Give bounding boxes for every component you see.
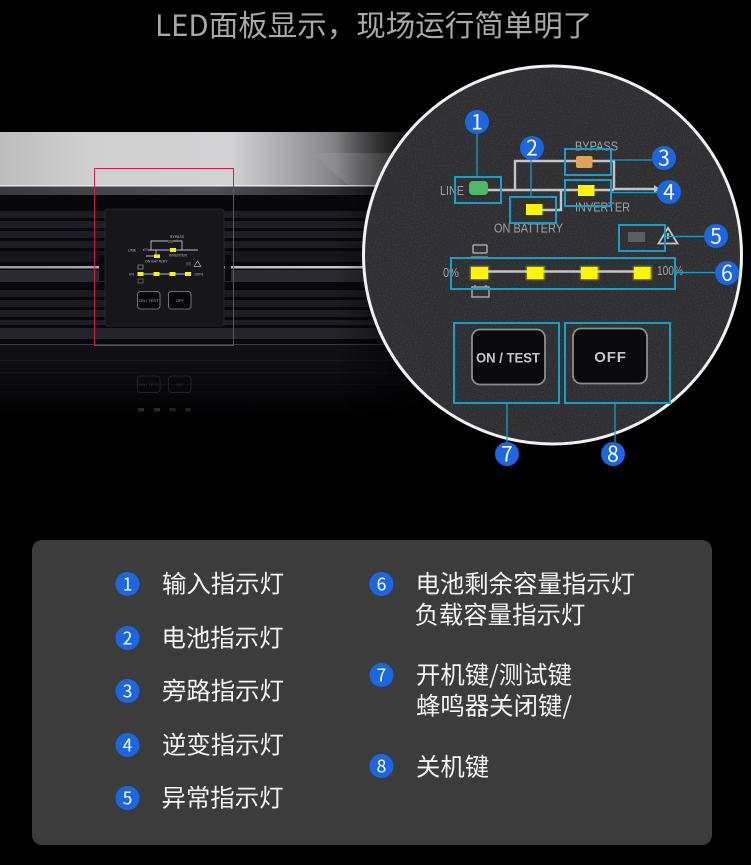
indicator labels: INVERTER	[575, 200, 630, 214]
callout 4: inverter indicator	[565, 176, 681, 206]
legend item 5: 5	[123, 785, 132, 810]
title: LED面板显示，现场运行简单明了	[155, 3, 592, 45]
legend item 3: 3	[123, 678, 132, 703]
OFF button	[573, 328, 647, 384]
legend item 6: 6	[377, 571, 386, 596]
callout 6: capacity indicators	[451, 258, 739, 289]
callout 5: fault indicator	[619, 220, 728, 251]
legend item 6: 负载容量指示灯	[414, 596, 585, 632]
callout 3: bypass indicator: 3	[658, 142, 670, 172]
callout 1: line indicator: 1	[471, 106, 483, 136]
callout 8: off key	[565, 323, 670, 468]
LED: inverter	[578, 185, 594, 196]
OFF button: OFF	[594, 349, 627, 366]
LED: on battery	[526, 204, 542, 215]
indicator labels: 0%	[443, 266, 459, 280]
icon: computer load	[471, 245, 488, 257]
legend item 2: 2	[123, 625, 132, 650]
output arrow	[654, 185, 660, 193]
small control panel on the UPS	[99, 209, 231, 326]
product photo: UPS front	[0, 132, 420, 420]
callout 7: on/test key	[454, 323, 559, 468]
ON/TEST button	[472, 330, 545, 384]
indicator labels: 100%	[657, 264, 683, 278]
callout 8: off key: 8	[607, 438, 619, 468]
LED: bypass (orange)	[576, 156, 592, 168]
legend item 5: 异常指示灯	[162, 780, 283, 814]
panel reflection: ON / TEST	[139, 382, 159, 387]
icon: warning triangle	[658, 228, 678, 244]
small panel labels: LINE	[128, 248, 137, 252]
small panel labels: 100%	[194, 272, 204, 276]
callout 5: fault indicator: 5	[710, 220, 722, 250]
indicator labels: ON BATTERY	[494, 222, 564, 236]
legend item 8	[370, 748, 489, 784]
red highlight frame	[94, 168, 234, 346]
small panel load LEDs	[138, 261, 201, 283]
legend item 7: 蜂鸣器关闭键/	[416, 688, 572, 722]
small panel labels: INVERTER	[169, 254, 188, 258]
small OFF button: OFF	[176, 298, 184, 303]
legend item 2: 电池指示灯	[162, 620, 283, 654]
small ON/TEST button: ON / TEST	[139, 298, 159, 303]
LED: line input (green)	[469, 181, 488, 195]
callout 2: battery indicator	[510, 132, 556, 223]
circuit diagram lines	[488, 161, 655, 210]
legend item 7	[370, 656, 572, 722]
legend item 4: 4	[123, 732, 133, 757]
callout 2: battery indicator: 2	[526, 132, 538, 162]
legend item 8: 关机键	[416, 748, 489, 784]
indicator labels	[440, 140, 683, 280]
panel reflection: OFF	[176, 382, 184, 387]
legend item 6: 电池剩余容量指示灯	[416, 566, 635, 600]
small panel labels: 0%	[129, 272, 135, 276]
panel reflection	[138, 376, 191, 412]
legend item 8: 8	[377, 753, 386, 778]
ON/TEST button: ON / TEST	[476, 350, 540, 366]
small panel labels: BYPASS	[170, 235, 185, 239]
callout 1: line indicator	[455, 106, 501, 203]
legend panel	[32, 540, 712, 845]
callout 4: inverter indicator: 4	[663, 176, 675, 206]
legend item 1: 输入指示灯	[162, 566, 284, 600]
legend item 6	[370, 566, 635, 632]
callout 7: on/test key: 7	[501, 438, 513, 468]
indicator labels: LINE	[440, 184, 464, 198]
small panel labels	[128, 235, 204, 276]
capacity LED row	[470, 266, 652, 280]
small panel labels: ON BATTERY	[145, 260, 168, 264]
small panel circuit lines	[143, 241, 198, 256]
legend item 7: 开机键/测试键	[416, 656, 572, 692]
legend item 4: 逆变指示灯	[162, 726, 284, 762]
legend item 3: 旁路指示灯	[162, 672, 284, 708]
callout 6: capacity indicators: 6	[721, 258, 733, 288]
magnified panel circle	[360, 62, 750, 452]
LED: fault (off)	[628, 232, 645, 242]
legend item 7: 7	[377, 662, 386, 687]
legend item 1: 1	[123, 571, 132, 596]
icon: battery	[472, 285, 489, 297]
indicator labels: BYPASS	[575, 140, 618, 154]
callout 3: bypass indicator	[565, 142, 676, 175]
